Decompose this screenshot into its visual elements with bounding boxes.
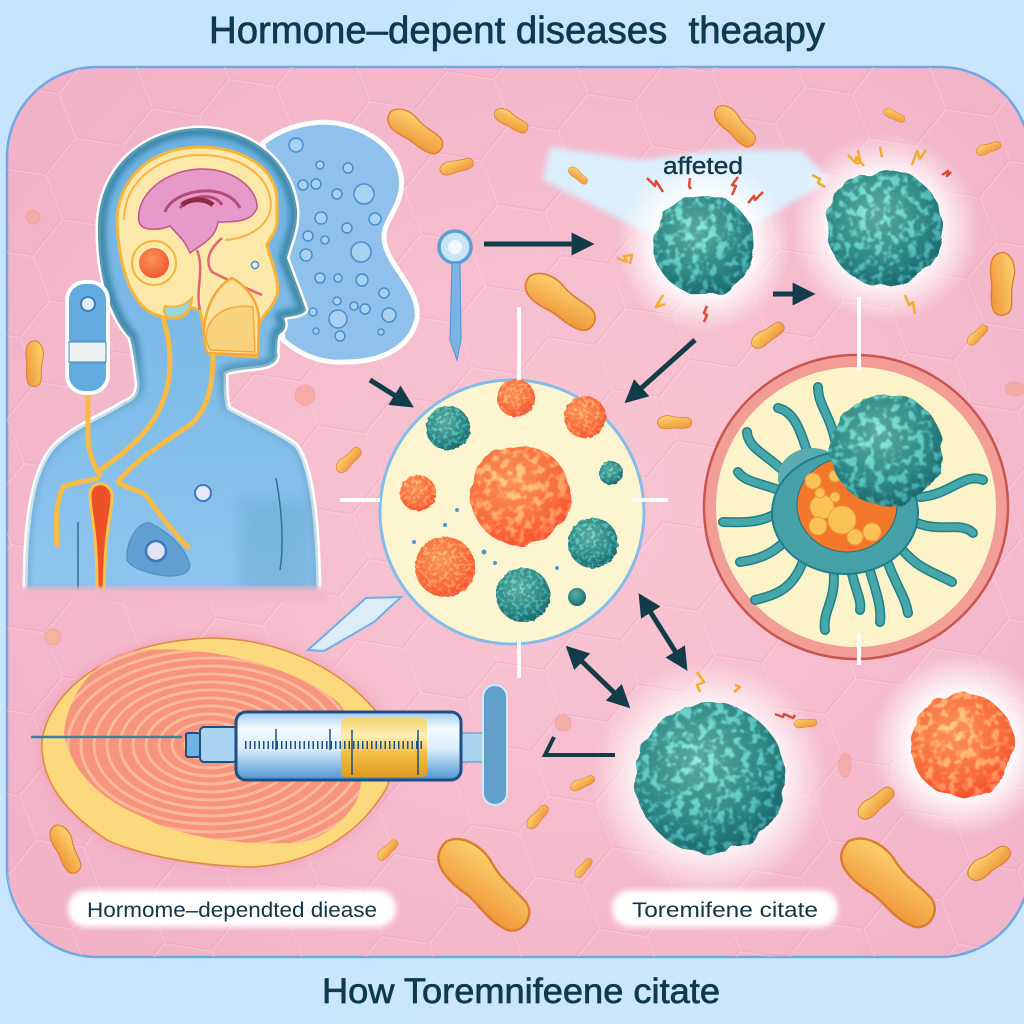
large orange cell [470,445,570,545]
footer caption: How Toremnifeene citate [322,972,720,1011]
title: Hormone–depent diseases theaapy [209,10,825,52]
body crease [78,478,282,590]
panel: tissue cross-section [29,634,392,867]
arrow [773,292,811,296]
icon: syringe [31,685,507,805]
pocket dot [146,541,166,561]
mouth tissue [206,306,255,352]
panel: macrophage circle [704,355,1008,659]
teal cell [568,518,618,568]
panel: central circle of cells [380,379,644,644]
icon: capsule [67,282,108,393]
label: Toremifene citate [612,890,838,927]
cell ring body [772,448,918,574]
arrow [484,242,590,246]
brain folds [165,191,240,212]
vertical ticks [857,297,861,665]
sparks [617,147,951,718]
pale pink spots [26,210,1024,777]
arrow [628,340,695,400]
small orange cell [497,379,535,417]
label: Hormome-dependted diease [68,890,396,927]
icon: brain [139,169,257,253]
head shading [25,128,319,593]
icon: probe key [439,231,471,360]
affected cell top centre [616,157,792,333]
arrow [545,737,615,755]
body silhouette [25,128,319,593]
body dots [195,485,211,501]
crosshair ticks [340,307,668,678]
body bottom fade [18,587,326,601]
teal cell bottom [592,660,828,896]
label: Hormome-dependted diease: Hormome–dependted diease [87,899,377,922]
orange cell bottom right [870,653,1024,837]
arrow [370,380,410,405]
arrow [641,597,685,667]
label: Toremifene citate: Toremifene citate [632,899,818,922]
small orange cell [564,396,606,438]
nerve paths [56,318,213,547]
highlight band behind affected label [543,147,830,235]
teal cell [568,588,586,606]
orange bean microbes [21,102,1022,937]
label: affected: affeted [663,153,743,180]
orange cell [415,537,475,597]
small orange cell [400,475,436,511]
inner head outline [124,155,271,240]
throat [204,278,259,355]
head interior [117,147,278,357]
teal cell [426,406,470,450]
brain core [182,200,213,205]
small dot [252,262,258,268]
tentacles [723,387,983,630]
pocket [127,523,190,576]
icon: water droplet tissue blob [263,122,417,362]
pituitary channel [197,238,262,310]
arrows [370,244,811,755]
panel: human figure [25,128,319,593]
teal cell [599,461,623,485]
orange nucleus [797,458,897,552]
affected cell top right [790,133,980,323]
red node [90,484,112,590]
thyroid [164,298,192,318]
arrow [569,649,627,705]
teal cell [496,568,550,622]
gland [132,241,176,285]
teal cell on top [831,394,943,506]
arrow: light blue outline [308,597,401,651]
